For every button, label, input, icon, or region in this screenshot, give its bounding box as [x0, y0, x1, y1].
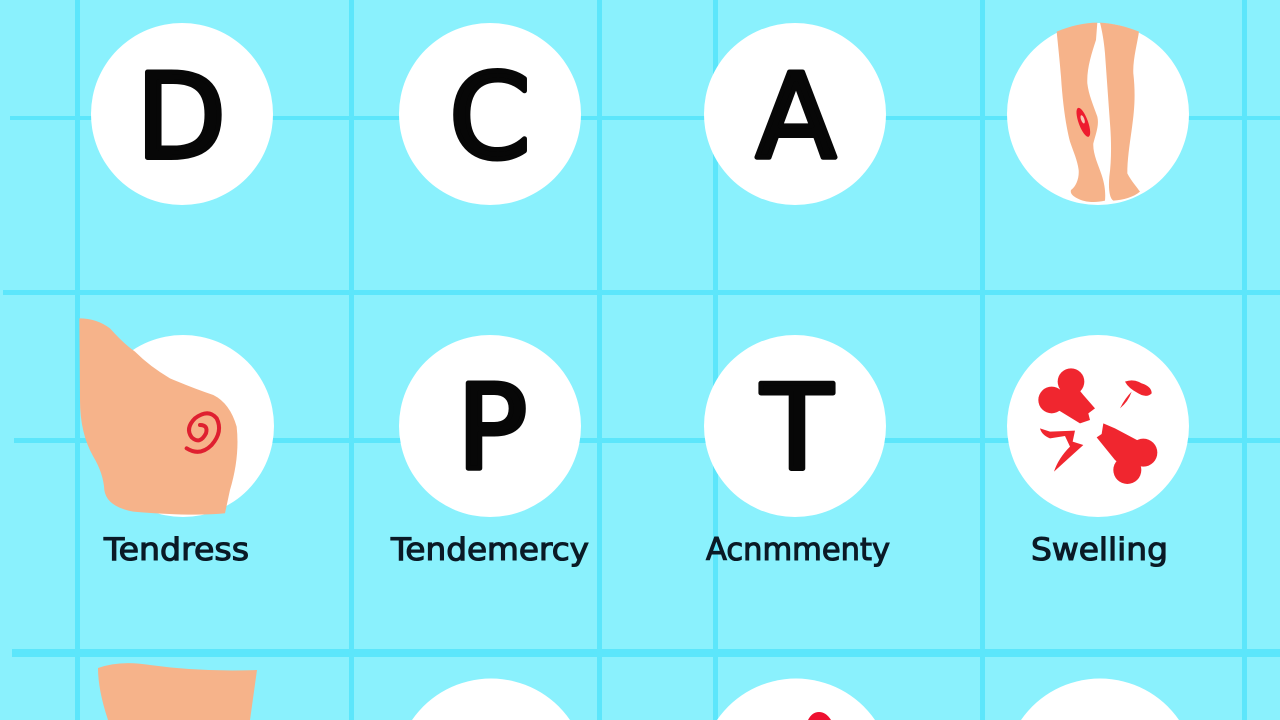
label: Acnmmenty: Acnmmenty	[706, 532, 890, 568]
row 3: badge, cropped	[1021, 679, 1179, 720]
row 1: letter A badge: A	[756, 48, 836, 186]
row 2: shoulder with pain spiral icon	[79, 318, 274, 517]
label: Tendress: Tendress	[103, 532, 249, 568]
row 2: letter T badge: T	[760, 360, 833, 496]
row 1: letter D badge: D	[136, 48, 226, 186]
row 2: letter P badge: P	[457, 360, 527, 496]
row 1: letter C badge	[399, 23, 581, 205]
row 1: letter A badge	[704, 23, 886, 205]
label: Swelling: Swelling	[1031, 532, 1168, 568]
row 1: letter D badge	[91, 23, 273, 205]
row 2: letter T badge	[704, 335, 886, 517]
row 2: broken bone icon	[1007, 335, 1189, 517]
row 1: legs with wound icon	[1007, 23, 1189, 205]
label: Tendemercy: Tendemercy	[390, 532, 589, 568]
row 1: letter C badge: C	[449, 48, 531, 186]
row 3: badge, cropped	[412, 679, 570, 720]
row 2: letter P badge	[399, 335, 581, 517]
row 3: limb icon, cropped	[98, 663, 257, 720]
row 3: badge with red icon, cropped	[717, 679, 875, 720]
